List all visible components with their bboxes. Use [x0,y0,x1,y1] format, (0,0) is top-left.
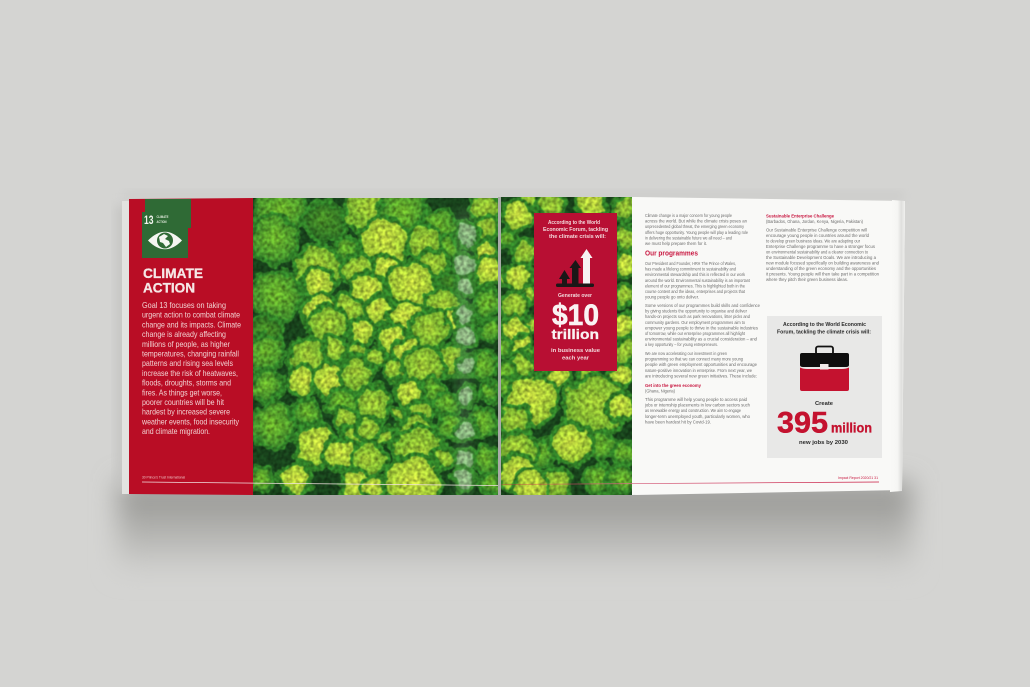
intro paragraph: in delivering the sustainable future we all need – and [645,235,732,241]
column two article text [766,214,879,283]
million: million [831,420,872,436]
paragraph: this programme: jobs or internship placements in low carbon sectors such [644,403,750,409]
right page footer: Impact Report 2020/21 31 [838,476,878,480]
column one article text [644,213,760,425]
big figure: 395: 395 [777,406,828,440]
heading: climate action: CLIMATE [143,265,203,281]
create: Create [815,401,834,407]
callout intro text [543,220,609,240]
callout closing text [551,348,600,362]
goal 13 body text: hardest by increased severe [142,407,230,417]
paragraph: enterprise challenge: where they pitch their green business ideas. [766,277,848,283]
intro paragraph: across the world. But while the climate crisis poses an [645,219,747,225]
goal 13 body text: and climate migration. [142,426,210,436]
paragraph: president: around the world. Environmental sustainability is an important [645,278,751,284]
callout intro text: Economic Forum, tackling [543,227,609,233]
right forest photo [501,197,632,495]
icon: eye with globe [148,232,182,249]
paragraph: enterprise challenge [766,228,879,283]
paragraph: president: has made a lifelong commitment to sustainability and [645,267,736,273]
paragraph: enterprise challenge: Enterprise Challenge programme to have a stronger focus [766,244,875,250]
location: ghana nigeria: (Ghana, Nigeria) [645,389,675,395]
goal 13 body text: change is already affecting [142,329,226,339]
paragraph: president: environmental stewardship and this is reflected in our work [645,272,745,278]
intro paragraph: Climate change is a major concern for young people [645,213,732,219]
goal 13 body text: patterns and rising sea levels [142,358,233,368]
goal 13 body text: urgent action to combat climate [142,310,240,320]
paragraph: versions: a key opportunity – for young entrepreneurs. [645,342,718,348]
big figure: $10 [552,299,599,332]
heading: climate action [143,265,203,296]
paragraph: enterprise challenge: the Sustainable Development Goals. We are introducing a [766,255,876,261]
paragraph: accelerating: We are now accelerating our investment in green [645,351,727,357]
paragraph: versions: empower young people to thrive in the sustainable industries [645,325,758,331]
heading: climate action: ACTION [143,280,195,296]
left forest photo [253,198,498,495]
callout intro text: According to the World Economic [783,322,866,328]
location list: (Barbados, Ghana, Jordan, Kenya, Nigeria, Pakistan) [766,219,863,225]
goal 13 body text: temperatures, changing rainfall [142,348,239,358]
goal 13 body text: weather events, food insecurity [141,416,240,426]
paragraph: enterprise challenge: encourage young people in countries around the world [766,233,869,239]
paragraph: this programme: have been hardest hit by Covid-19. [645,419,711,425]
paragraph: president: element of our programmes. This is highlighted both in the [645,283,745,289]
badge label: CLIMATE [156,215,169,219]
paragraph: president: young people go onto deliver. [645,295,699,301]
paragraph: accelerating [645,351,757,379]
paragraph: enterprise challenge: understanding of the green economy and the opportunities [766,266,876,272]
paragraph: enterprise challenge: it presents. Young people will then take part in a competition [766,272,879,278]
left page footer rule [142,482,498,486]
intro paragraph: we must help prepare them for it. [645,241,707,247]
paragraph: versions: by giving students the opportunity to organise and deliver [645,309,747,315]
paragraph: versions: of tomorrow, while our enterprise programmes all highlight [645,331,746,337]
subheading: get into the green economy: Get into the green economy [645,383,701,389]
callout intro text: Forum, tackling the climate crisis will: [777,330,871,336]
red callout: $10 trillion [534,213,617,371]
paragraph: enterprise challenge: new module focused specifically on building awareness and [766,260,879,266]
trillion: trillion [552,326,599,342]
paragraph: this programme [644,397,750,425]
paragraph: president: course content and the ideas, enterprises and projects that [645,289,745,295]
left page red panel [129,198,254,495]
icon: rising arrows [556,249,594,287]
paragraph: president: Our President and Founder, HRH The Prince of Wales, [645,261,736,267]
book gutter [498,197,501,495]
callout intro text: According to the World [548,220,600,226]
generate over: Generate over [558,293,593,299]
SDG 13 badge [142,199,191,258]
right page footer rule [501,482,879,484]
paragraph: accelerating: people with green employment opportunities and encourage [645,362,757,368]
paragraph: president [645,261,751,301]
goal 13 body text: fires. As things get worse, [142,387,222,397]
paragraph: this programme: as renewable energy and construction. We aim to engage [645,408,741,414]
callout intro text [777,322,871,336]
book shadow [116,192,912,570]
goal 13 body text: poorer countries will be hit [142,397,225,407]
paragraph: versions: environmental sustainability as a crucial consideration – and [645,337,757,343]
paragraph: this programme: longer-term unemployed youth, particularly women, who [645,414,750,420]
goal 13 body text: Goal 13 focuses on taking [142,300,226,310]
paragraph: enterprise challenge: to develop green business ideas. We are adapting our [766,238,860,244]
heading: our programmes: Our programmes [645,248,698,258]
subheading: sustainable enterprise challenge: Sustainable Enterprise Challenge [766,214,834,220]
paragraph: versions [645,303,760,348]
goal 13 body text [141,300,241,436]
callout closing text: in business value [551,348,600,354]
badge label [156,215,169,224]
intro paragraph: offers huge opportunity. Young people will play a leading role [645,230,748,236]
badge label: ACTION [156,220,167,224]
paragraph: accelerating: are introducing several new green initiatives. These include: [645,373,757,379]
paragraph: versions: Some versions of our programmes build skills and confidence [645,303,760,309]
callout closing text: each year [562,356,590,362]
intro paragraph: unprecedented global threat, the emerging green economy [645,224,744,230]
glare strip [458,210,470,495]
new jobs by 2030: new jobs by 2030 [799,440,848,446]
book page edge, left [122,201,129,494]
icon: briefcase [800,346,849,391]
paragraph: accelerating: programming so that we can connect many more young [645,357,743,363]
right page white area [632,197,905,495]
left page footer: 30 Prince's Trust International [142,476,185,480]
goal 13 body text: change and its impacts. Climate [142,319,241,329]
paragraph: this programme: This programme will help young people to access paid [645,397,747,403]
paragraph: enterprise challenge: Our Sustainable Enterprise Challenge competition will [766,228,867,234]
paragraph: versions: hands-on projects such as park renovations, litter picks and [645,314,750,320]
goal 13 body text: increase the risk of heatwaves, [142,368,238,378]
badge number: 13 [144,213,154,227]
paragraph: accelerating: nature-positive innovation in enterprise. From next year, we [645,368,752,374]
callout intro text: the climate crisis will: [549,234,606,240]
goal 13 body text: millions of people, as higher [142,339,230,349]
goal 13 body text: floods, droughts, storms and [142,378,231,388]
paragraph: versions: community gardens. Our employment programmes aim to [645,320,745,326]
intro paragraph [645,213,748,247]
grey callout: 395 million [767,316,882,458]
paragraph: enterprise challenge: on environmental sustainability and a clearer connection to [766,250,868,256]
